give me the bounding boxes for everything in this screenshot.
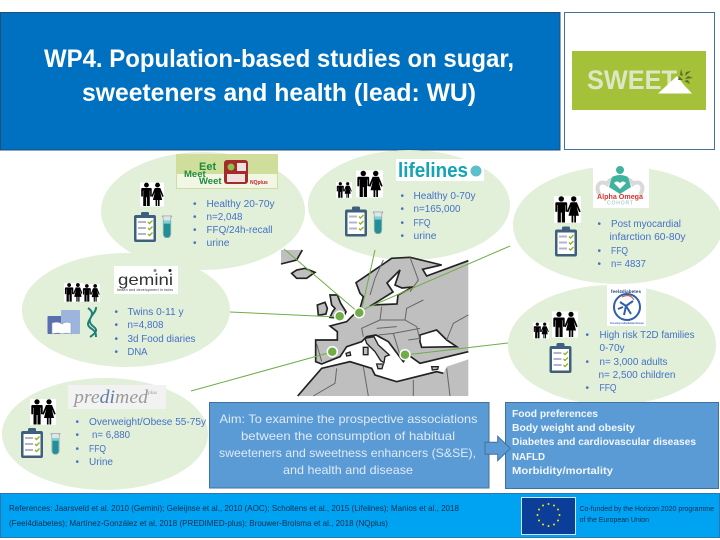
study details: • [598,246,602,257]
aim box: and health and disease [283,463,413,477]
aim box: between the consumption of habitual [241,429,455,443]
study details: Twins 0-11 y [128,307,184,318]
icon: questionnaire clipboard [555,226,577,256]
funding statement: of the European Union [580,517,649,524]
logo: Lifelines: lifelines [398,160,468,182]
icon: adults [356,170,383,198]
logo: Alpha Omega cohort: COHORT [607,200,633,206]
references and funding bar [0,494,720,538]
icon: questionnaire clipboard [134,212,156,242]
study details: • [76,430,80,441]
study details: n=4,808 [128,320,164,331]
study details: DNA [128,347,148,358]
study details: • [114,320,118,331]
study details: FFQ [611,246,628,257]
study details [114,307,196,358]
study details: FFQ [600,383,617,394]
icon: questionnaire clipboard [21,428,43,458]
outcomes box: Food preferences [512,408,598,420]
icon: adults [554,196,581,223]
study details: • [193,212,197,223]
aim box [210,402,489,488]
country location dots [327,308,410,360]
study details: • [114,334,118,345]
study details: n=2,048 [206,212,243,223]
study details: n= 6,880 [92,430,130,441]
panel: NQplus study [101,152,305,270]
icon: questionnaire clipboard [345,206,367,236]
study details: • [76,444,80,455]
study details: Overweight/Obese 55-75y [89,417,206,428]
connector lines from studies to countries [191,246,510,391]
study details: n= 3,000 adults [600,357,668,368]
logo: NQplus: Eet [199,161,216,173]
title banner: WP4. Population-based studies on sugar, [44,45,514,73]
study details: • [400,218,404,229]
study details: FFQ [414,218,431,229]
study details: • [586,383,590,394]
study details [76,417,206,468]
icon: DNA helix [88,307,96,337]
study details: • [586,330,590,341]
study details: n= 4837 [611,259,646,270]
study details: • [400,231,404,242]
logo: PREDIMED-plus [68,385,166,409]
study details: • [193,238,197,249]
logo: Alpha Omega cohort: Alpha Omega [597,192,644,201]
arrow: aim to outcomes [485,436,510,461]
logo: NQplus: Weet [199,176,222,187]
study details: Healthy 0-70y [414,191,476,202]
references text [9,503,459,528]
study details: • [193,225,197,236]
study details: infarction 60-80y [610,232,686,243]
logo: Alpha Omega cohort [593,162,649,208]
title banner [0,12,560,150]
study details: Urine [89,457,113,468]
logo: Feel4Diabetes [607,284,646,326]
panel: PREDIMED-plus study [2,378,208,490]
logo: Feel4Diabetes: feel4diabetes [611,289,641,294]
logo: PREDIMED-plus: plus [147,390,157,396]
outcomes box: Diabetes and cardiovascular diseases [512,436,696,448]
outcomes box [506,402,718,488]
panel: Gemini study [22,253,230,367]
study details: 3d Food diaries [128,334,196,345]
logo: NQplus: NQplus [250,180,268,186]
icon: urine test tube [373,212,383,234]
funding statement [580,506,714,524]
study details: • [400,204,404,215]
study details: • [598,219,602,230]
study details: Post myocardial [611,219,681,230]
icon: questionnaire clipboard [550,343,572,373]
logo: Gemini [114,266,178,294]
outcomes box: Body weight and obesity [512,422,635,434]
logo: Gemini: gemini [118,272,173,289]
study details: FFQ/24h-recall [206,225,272,236]
icon: children [336,182,352,198]
logo: NQplus [176,154,278,189]
outcomes box: Morbidity/mortality [512,465,613,477]
study details: • [193,199,197,210]
icon: urine test tube [51,433,60,454]
funding statement: Co-funded by the Horizon 2020 programme [580,506,714,513]
references text: (Feel4diabetes); Martínez-González et al, 2018 (PREDIMED-plus); Brouwer-Brolsma et al., 2018 (NQplus) [9,518,388,528]
study details [586,330,694,394]
icon: urine test tube [162,216,172,238]
study details: Healthy 20-70y [206,199,274,210]
map of Europe [281,250,468,396]
study details: n=165,000 [414,204,461,215]
panel: Lifelines study [308,150,510,260]
icon: adults [552,312,578,338]
study details [598,219,686,270]
SWEET logo panel [564,12,714,150]
aim box: sweeteners and sweetness enhancers (S&SE), [219,446,476,460]
panel: Feel4Diabetes study [508,284,716,405]
outcomes box: NAFLD [512,451,545,463]
study details: • [114,307,118,318]
study details: • [114,347,118,358]
title banner: sweeteners and health (lead: WU) [82,79,476,107]
study details: • [400,191,404,202]
icon: adults [30,399,56,425]
references text: References: Jaarsveld et al. 2010 (Gemini); Geleijnse et al., 2010 (AOC); Scholtens et al., 2015 (Lifelines); Manios et al., 2018 [9,503,459,513]
icon: food diaries books [48,310,80,334]
icon: EU flag [522,498,576,534]
logo: Gemini: health and development in twins [117,288,173,292]
study details: • [76,417,80,428]
study details [400,191,476,242]
study details: n= 2,500 children [598,370,676,381]
study details: urine [206,238,230,249]
study details: • [76,457,80,468]
icon: children [533,322,549,338]
study details: • [598,259,602,270]
icon: adults [140,182,164,206]
study details [193,199,274,249]
logo: Feel4Diabetes: Promoting healthy lifestyle in Europe [610,321,644,325]
study details: • [586,357,590,368]
panel: Alpha Omega study [513,162,720,284]
aim box: Aim: To examine the prospective associations [220,412,478,426]
study details: urine [414,231,437,242]
study details: FFQ [89,444,106,455]
logo: NQplus: Meet [184,169,206,180]
SWEET logo panel: SWEET [587,65,677,95]
study details: High risk T2D families [600,330,694,341]
study details: 0-70y [600,343,624,354]
logo: PREDIMED-plus: predimed [72,387,149,408]
icon: twins [64,283,100,302]
